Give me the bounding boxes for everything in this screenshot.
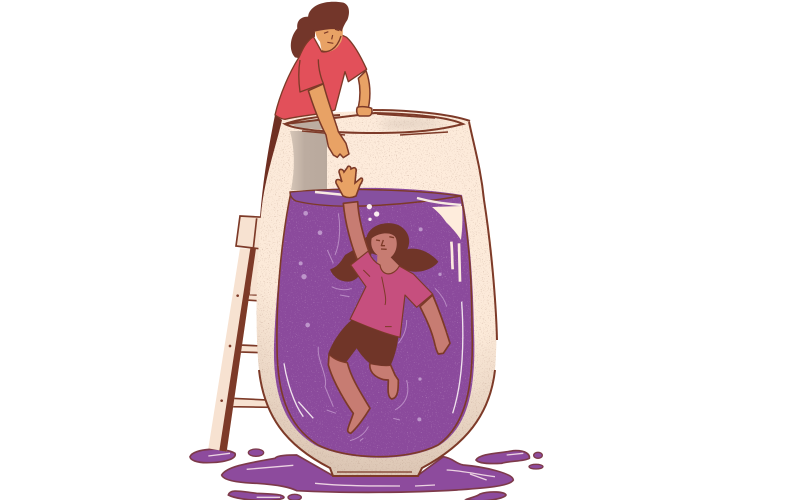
puddle of purple liquid on the floor — [190, 449, 543, 500]
face features — [376, 237, 394, 249]
standing woman's dark trousers — [260, 115, 285, 217]
woman's face and neck — [315, 27, 343, 52]
left leg — [328, 354, 370, 433]
underwater hair — [330, 223, 438, 282]
hand gripping the rim — [357, 107, 372, 116]
woman's hair — [308, 2, 349, 32]
standing woman leaning over the glass — [275, 2, 372, 158]
girl's hand breaking the surface — [336, 166, 363, 198]
purple liquid in the glass — [274, 188, 474, 458]
illustration: woman reaching into a giant glass to rescue a drowning girl — [189, 2, 544, 500]
woman's ponytail — [291, 17, 315, 58]
reaching arm — [308, 84, 349, 158]
drowning girl underwater — [284, 202, 463, 441]
right arm — [420, 295, 450, 354]
face and neck — [371, 233, 401, 278]
sleeve — [299, 59, 323, 92]
right lower leg — [370, 363, 398, 399]
giant glass — [250, 100, 505, 485]
woman's red shirt — [275, 35, 367, 119]
raised arm — [343, 202, 369, 260]
water ripples and highlights — [318, 213, 447, 441]
wooden ladder — [208, 216, 270, 452]
glass rim — [285, 110, 470, 135]
pink shirt — [350, 251, 433, 337]
dark shorts — [328, 320, 398, 366]
arm resting on the rim — [358, 71, 370, 108]
